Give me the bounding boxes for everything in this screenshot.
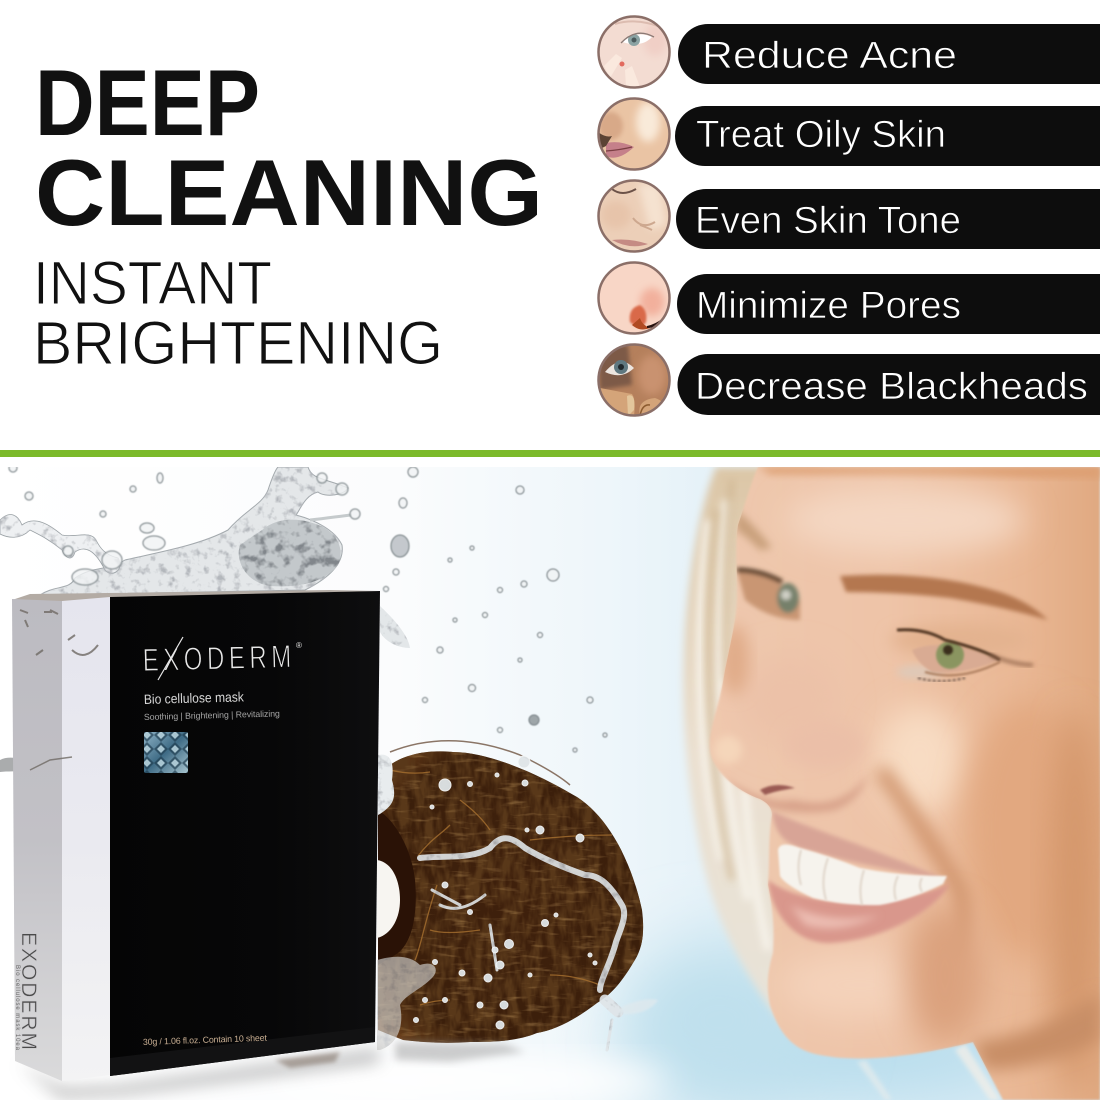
box front panel <box>110 591 380 1076</box>
brand logo: EXODERM <box>142 638 296 678</box>
benefits line: Soothing | Brightening | Revitalizing <box>144 708 280 722</box>
pill label: reduce acne <box>678 24 1100 84</box>
pill label: minimize pores: Minimize Pores <box>696 285 961 327</box>
pill label: minimize pores <box>677 274 1100 334</box>
pill label: decrease blackheads <box>678 354 1100 415</box>
box side panel <box>12 597 110 1081</box>
pill label: treat oily skin: Treat Oily Skin <box>696 114 946 156</box>
water over coconut <box>377 755 658 1050</box>
box side panel: Bio cellulose mask 10ea <box>14 965 20 1051</box>
subtitle: instant brightening <box>33 249 443 377</box>
photo panel <box>0 464 1100 1100</box>
icon: uneven skin face <box>598 180 670 252</box>
water splash behind box <box>0 467 410 772</box>
water left of box <box>0 758 14 772</box>
subtitle: instant brightening: BRIGHTENING <box>33 309 443 377</box>
benefit: reduce acne <box>598 16 1100 88</box>
icon: nose pores <box>598 262 670 334</box>
hair <box>683 467 1000 1100</box>
title: deep cleaning: DEEP <box>35 50 260 155</box>
pill label: even skin tone <box>676 189 1100 249</box>
product box <box>12 590 380 1081</box>
right eye <box>890 624 1033 681</box>
product name: Bio cellulose mask <box>144 689 244 707</box>
background <box>461 467 1100 1100</box>
main splash body <box>40 467 348 595</box>
mouth <box>768 811 950 943</box>
water right of box <box>380 606 410 648</box>
ground shadow and reflection <box>18 1042 525 1098</box>
left eye <box>737 570 800 620</box>
brand logo: ® <box>296 641 302 650</box>
pill label: reduce acne: Reduce Acne <box>702 35 957 77</box>
benefit: even skin tone <box>598 180 1100 252</box>
left water stream <box>0 515 120 573</box>
icon: oily skin face <box>598 98 670 170</box>
water droplets <box>9 464 607 763</box>
water at coconut base <box>377 957 436 1050</box>
splash tail <box>620 999 658 1014</box>
coconut <box>370 740 650 1050</box>
pill label: treat oily skin <box>675 106 1100 166</box>
pill label: even skin tone: Even Skin Tone <box>695 200 961 242</box>
nose underside <box>728 780 866 816</box>
title: deep cleaning <box>35 50 543 245</box>
subtitle: instant brightening: INSTANT <box>33 249 272 317</box>
dark water core <box>239 520 341 586</box>
skin shading <box>714 467 1100 1090</box>
eyebrows <box>736 510 1048 620</box>
green divider <box>0 450 1100 457</box>
title: deep cleaning: CLEANING <box>35 140 543 245</box>
hologram seal <box>144 732 188 773</box>
box top flap <box>12 590 380 602</box>
icon: eye and fingers <box>598 344 670 416</box>
benefit: treat oily skin <box>598 98 1100 170</box>
benefit: minimize pores <box>598 262 1100 334</box>
water stream <box>420 838 624 1050</box>
icon: eye with acne <box>598 16 670 88</box>
water thread <box>310 515 352 520</box>
droplets on coconut <box>414 756 597 1029</box>
benefit: decrease blackheads <box>598 344 1100 416</box>
side brand text: EXODERM <box>17 932 40 1050</box>
pill label: decrease blackheads: Decrease Blackheads <box>695 366 1088 408</box>
woman's face <box>683 467 1100 1100</box>
water at coconut top <box>378 755 394 815</box>
net weight: 30g / 1.06 fl.oz. Contain 10 sheet <box>143 1033 268 1047</box>
face skin <box>710 467 1100 1100</box>
facial features <box>714 467 1100 1090</box>
teeth <box>778 844 947 905</box>
